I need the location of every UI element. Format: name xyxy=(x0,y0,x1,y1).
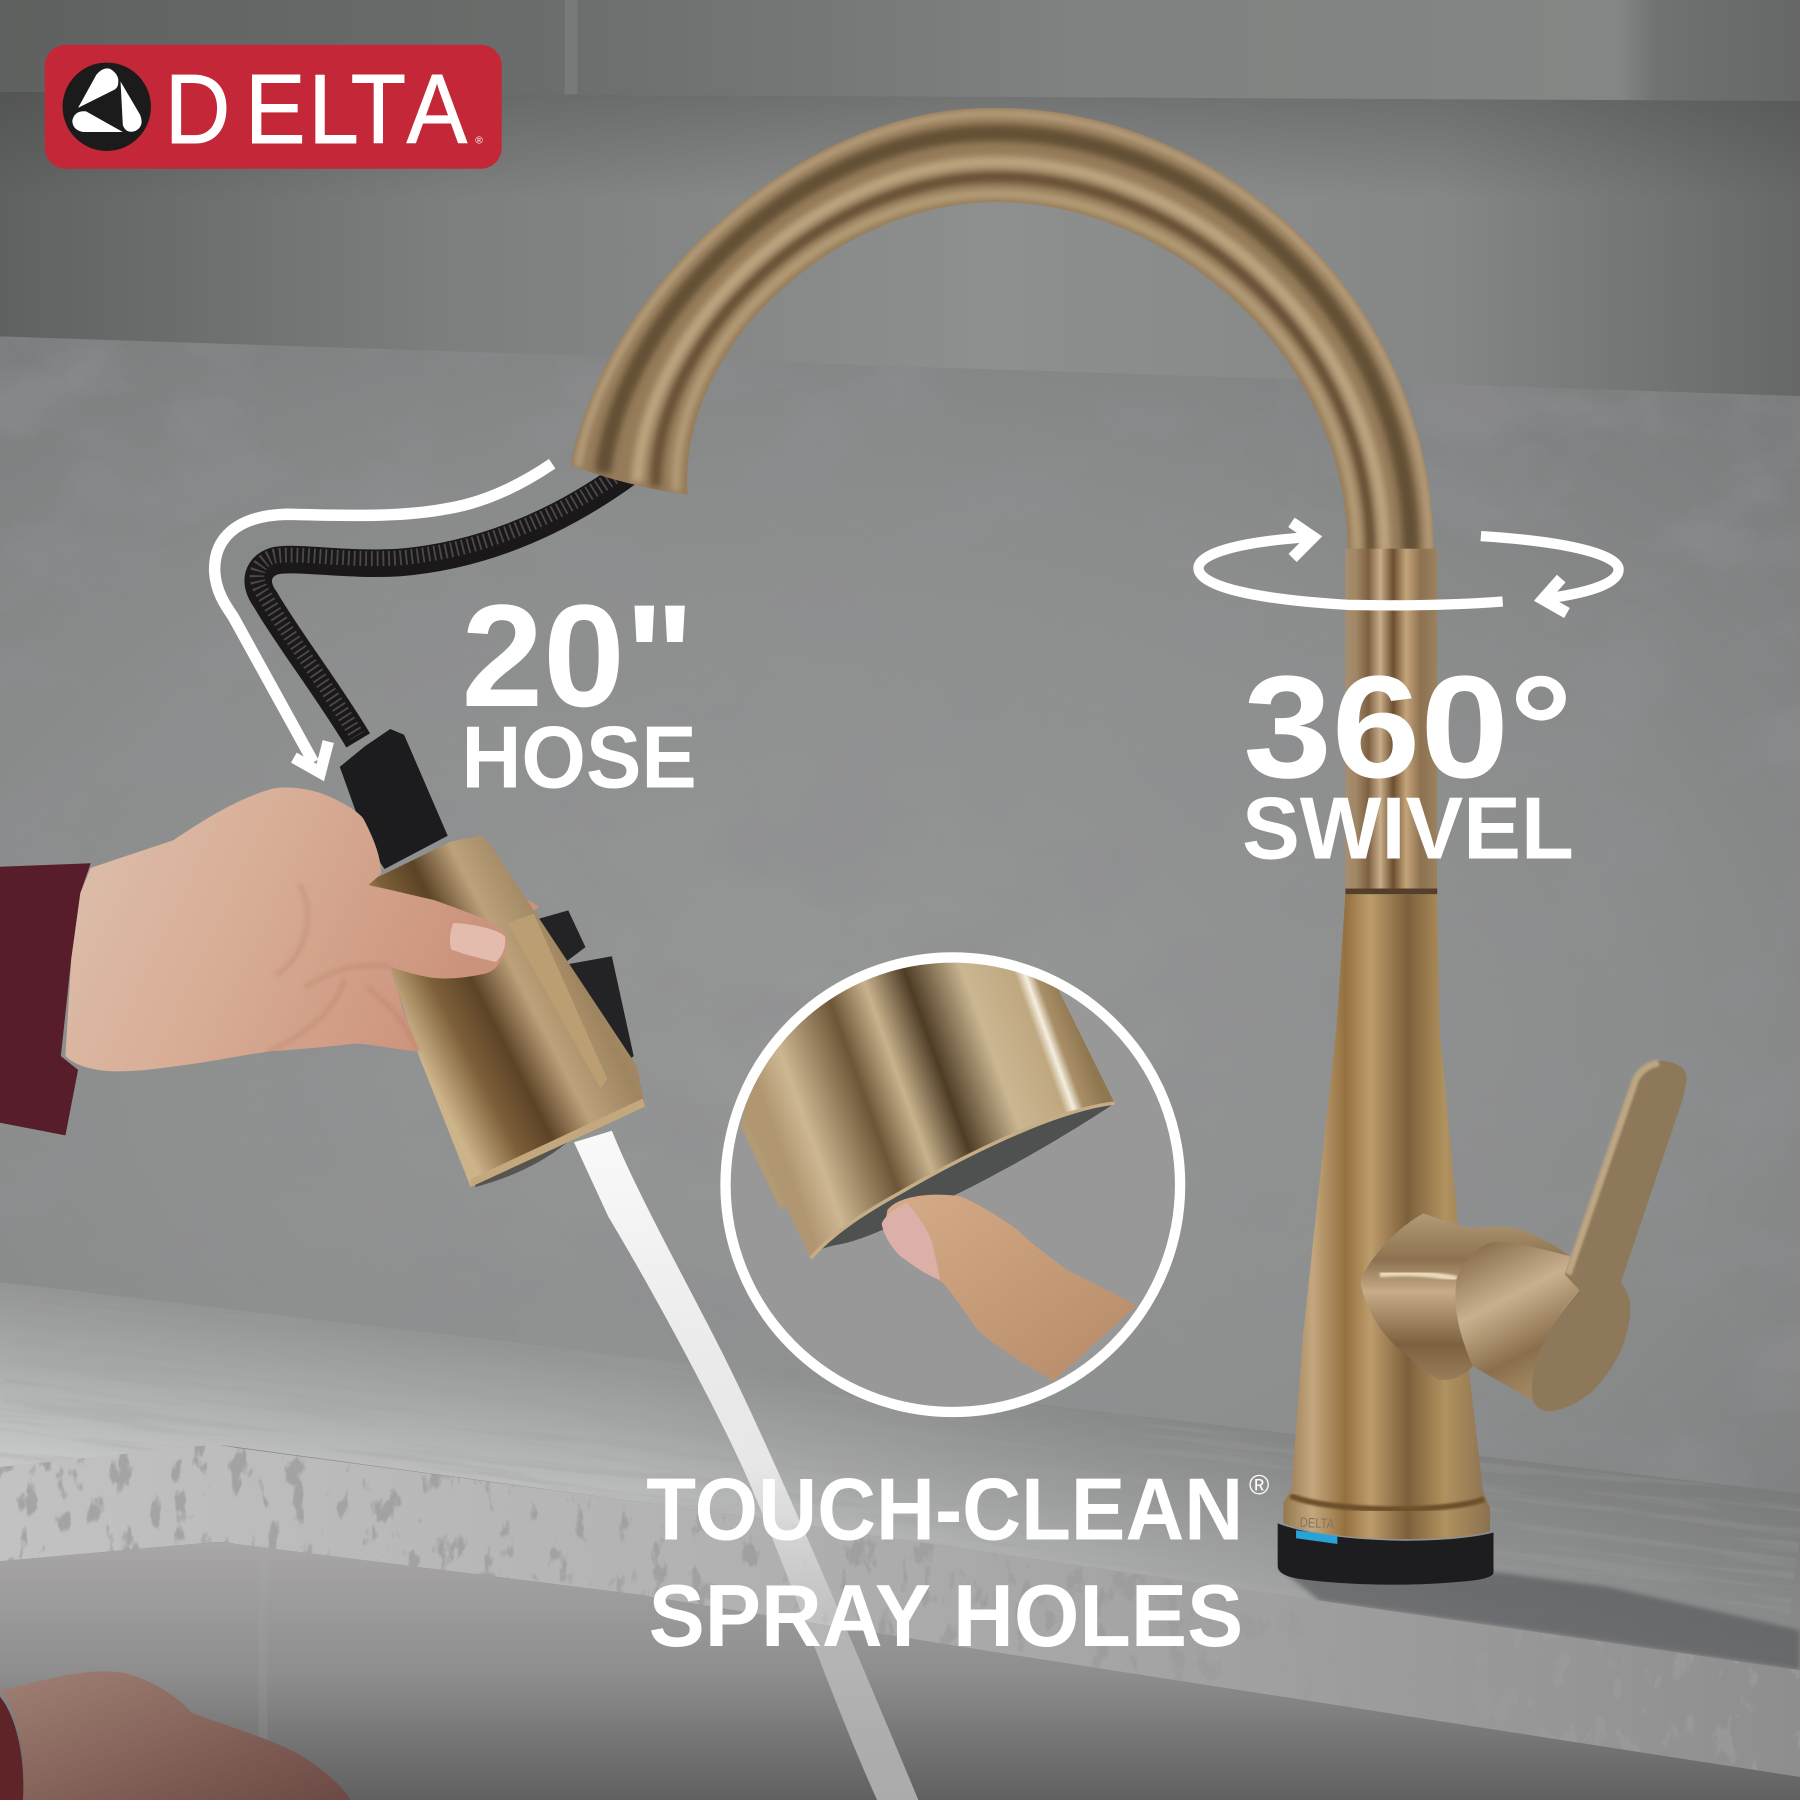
hose length figure: 20" xyxy=(461,574,695,737)
logo red badge xyxy=(45,45,502,169)
faucet xyxy=(562,103,1687,1585)
callout: 20 inch hose xyxy=(461,574,697,807)
hub highlight xyxy=(1380,1273,1457,1279)
thumb and palm creases xyxy=(269,884,419,1052)
arrow: hose length xyxy=(215,464,552,773)
sleeve xyxy=(0,863,91,1135)
spray nozzle face xyxy=(475,1139,572,1187)
swivel collar xyxy=(1345,889,1437,894)
touch-clean label: TOUCH-CLEAN xyxy=(646,1459,1243,1558)
base shadow ring xyxy=(1290,1496,1484,1509)
inset finger xyxy=(884,1195,1136,1381)
hose label: HOSE xyxy=(461,708,697,807)
logo wordmark: DELTA xyxy=(165,54,468,165)
callout: 360 degree swivel xyxy=(1242,645,1574,878)
fingers behind spray head xyxy=(511,890,540,918)
panel: countertop xyxy=(0,1282,1800,1800)
handle hub xyxy=(1360,1213,1584,1401)
inset spray head xyxy=(735,953,1115,1258)
logo triangle mark xyxy=(72,68,142,132)
spray wand head xyxy=(366,836,645,1187)
Delta logo xyxy=(45,45,502,169)
panel: marble backsplash xyxy=(0,333,1800,1527)
faucet neck xyxy=(1345,549,1437,890)
inset fingernail xyxy=(882,1203,940,1280)
base black ring xyxy=(1278,1523,1493,1585)
hand holding spray head xyxy=(65,788,507,1071)
lever highlight edge xyxy=(1568,1063,1659,1274)
swivel figure: 360° xyxy=(1243,645,1573,808)
faucet arch spout xyxy=(562,103,1446,562)
side trim xyxy=(507,914,607,1088)
panel: touch-clean inset circle xyxy=(726,953,1180,1412)
pull-down hose xyxy=(257,460,638,740)
callout: touch-clean spray holes xyxy=(646,1459,1269,1665)
sink-side hand at bottom left xyxy=(0,1671,350,1800)
blue LED indicator xyxy=(1296,1530,1337,1544)
spray holes label: SPRAY HOLES xyxy=(649,1566,1243,1665)
handle lever and end cap xyxy=(1532,1061,1687,1411)
handle cylinder xyxy=(1455,1242,1580,1401)
registered mark: ® xyxy=(1249,1470,1269,1501)
fingernail xyxy=(450,923,505,962)
inset rim xyxy=(810,1103,1115,1258)
background: kitchen wall xyxy=(0,0,1800,397)
water stream xyxy=(574,1131,918,1800)
logo registered mark: ® xyxy=(475,135,483,146)
spray head rim xyxy=(471,1099,645,1187)
hose connector xyxy=(340,729,448,869)
inset side trim xyxy=(740,1116,786,1210)
arrows: swivel rotation xyxy=(1198,522,1619,613)
logo black circle xyxy=(63,63,151,151)
spray head black button xyxy=(536,910,634,1070)
faucet base body xyxy=(1283,894,1490,1539)
engraved brand: DELTA xyxy=(1299,1515,1335,1532)
swivel label: SWIVEL xyxy=(1242,779,1574,878)
inset spray holes xyxy=(817,1103,1115,1250)
